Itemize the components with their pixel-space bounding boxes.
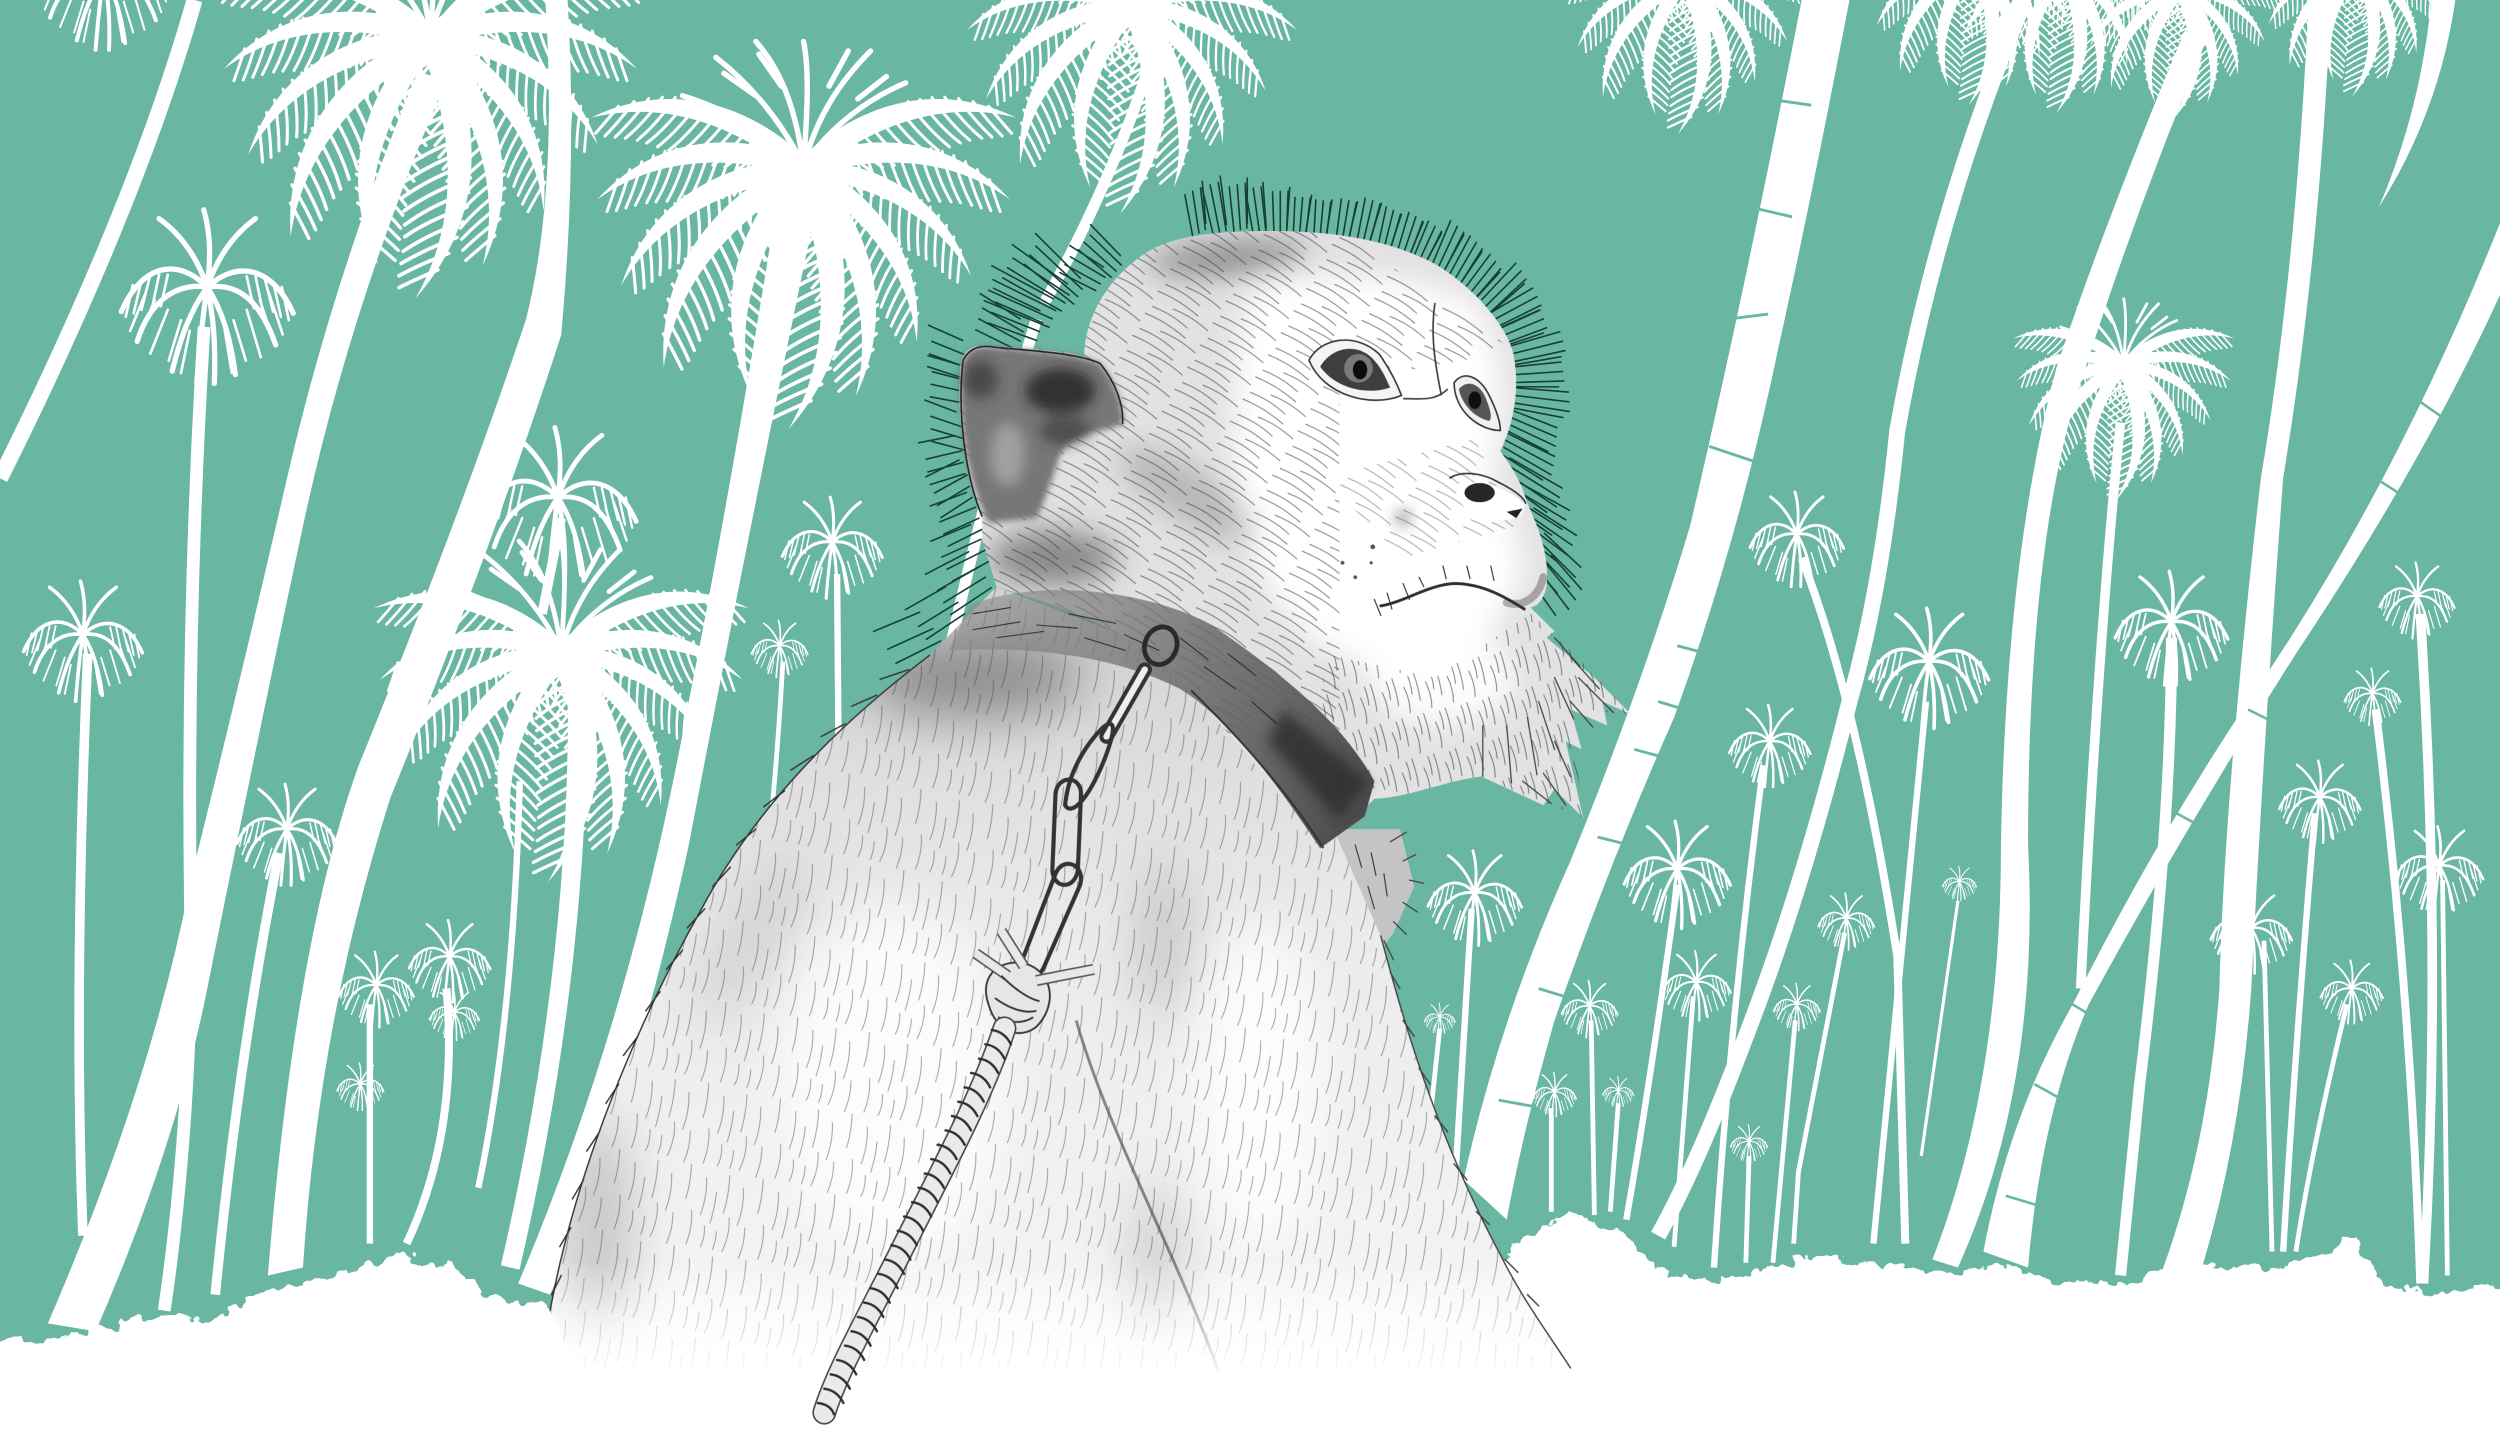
palm: small — [1428, 851, 1522, 1172]
rope — [818, 1028, 1011, 1414]
chain — [1022, 622, 1182, 977]
palm: big central-right trunk — [1464, 0, 1849, 1220]
head shading — [989, 237, 1522, 725]
palm: far-right slim 2 — [2344, 668, 2420, 1283]
beard hairs — [1483, 638, 1614, 805]
palm: large frond top right corner — [2379, 0, 2455, 207]
head fringe hairs — [874, 154, 1584, 679]
palm: right tall trunk — [1932, 0, 2290, 1268]
palm: small — [1714, 705, 1810, 1268]
palm: thin crossing — [1750, 492, 1905, 1244]
palm: top centre behind monkey — [949, 0, 1307, 654]
arm crease — [1076, 1020, 1220, 1374]
palms: tiny distant group — [1424, 866, 1977, 1263]
rope knot — [976, 931, 1094, 1033]
palm forest: left group — [0, 0, 1307, 1331]
palm: far-left small — [24, 581, 142, 1236]
right eye — [1454, 376, 1500, 430]
palm: far left top trunk — [0, 0, 195, 478]
body outline hairs — [550, 655, 930, 1311]
brow crease — [1403, 303, 1448, 399]
palm: big diagonal trunk — [1983, 223, 2500, 1268]
palm: small — [1624, 821, 1730, 1220]
palm forest: right group — [1424, 0, 2500, 1283]
palm: far-right slim 5 — [2396, 826, 2483, 1275]
palm: centre-left wide crown — [369, 541, 753, 1268]
palm: left medium — [121, 210, 293, 1311]
palm: thin right — [1870, 608, 1989, 1244]
left eye — [1309, 340, 1401, 400]
head — [941, 207, 1642, 848]
palm: far-right tall trunk — [1945, 0, 2469, 1283]
palm: slim small — [752, 620, 808, 829]
palm: far-right tall slim — [2380, 563, 2455, 1283]
palm: tall trunk at top — [268, 0, 571, 1275]
palm: far-right slim 6 — [2211, 891, 2292, 1252]
collar — [949, 590, 1374, 848]
palm: low small pair — [337, 920, 490, 1244]
body shading — [566, 636, 1189, 1339]
nose — [1449, 474, 1526, 521]
palm: far-right slim 4 — [2296, 960, 2383, 1252]
palm: crown over right trunk — [2010, 299, 2237, 989]
palm: right middle — [2115, 571, 2228, 1275]
chest tuft — [1320, 829, 1424, 960]
palm: large centre-left — [518, 41, 1022, 1295]
ground: white sand — [0, 1213, 2500, 1448]
palm: large top-left leaning — [48, 0, 649, 1331]
freckles — [1341, 509, 1413, 579]
palm: slender tall trunk — [1658, 0, 2097, 1236]
ear — [961, 346, 1123, 523]
palm: small behind — [480, 427, 636, 614]
mouth — [1374, 566, 1543, 615]
palm: slim — [782, 497, 882, 762]
body — [526, 574, 1610, 1387]
palm: hanging crown near big trunk — [1556, 0, 1818, 136]
monkey — [526, 154, 1642, 1414]
palm: far-right slim 3 — [2279, 761, 2360, 1252]
palm: low left — [215, 784, 337, 1295]
